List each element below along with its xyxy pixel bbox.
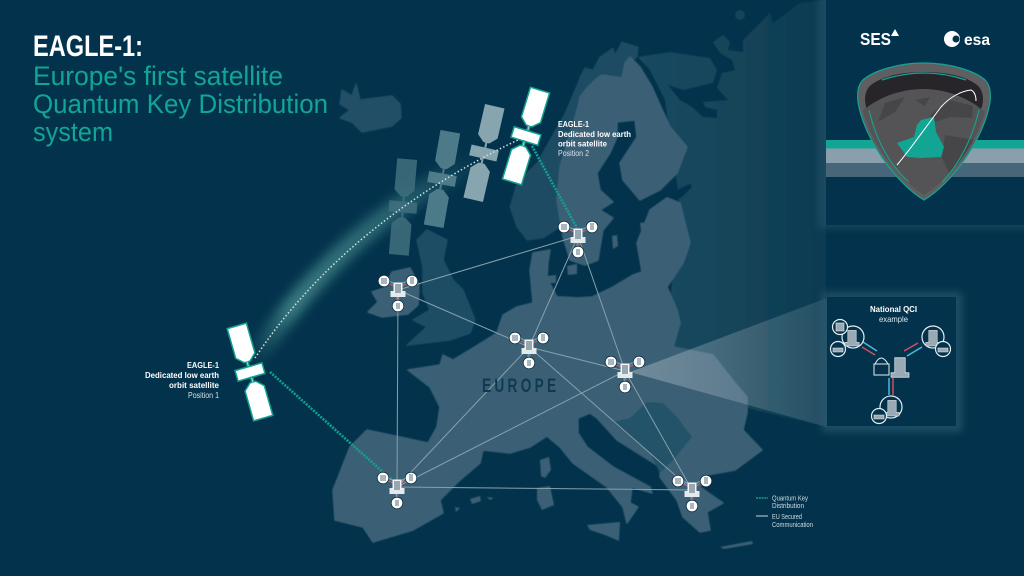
node: central Europe <box>509 332 549 369</box>
panel title: National QCI <box>870 304 917 314</box>
satellite position 1 <box>223 322 277 422</box>
site: bottom <box>872 396 902 424</box>
network links: EU secured communication <box>397 236 692 490</box>
land: Sweden and Finland <box>557 57 687 265</box>
node: eastern Europe <box>605 356 645 393</box>
satellite trail glow <box>255 160 480 358</box>
QKD beam: position 1 <box>270 372 392 480</box>
ghost satellite C <box>385 158 421 256</box>
shield badge <box>857 62 991 201</box>
site: upper left <box>830 320 864 356</box>
legend: Communication <box>772 522 813 529</box>
land: Iceland <box>340 84 401 132</box>
legend <box>756 496 813 529</box>
label: satellite position 2: orbit satellite <box>558 138 607 148</box>
label: satellite position 1: Dedicated low earth <box>145 370 219 380</box>
map label: Europe: EUROPE <box>482 375 556 397</box>
quantum links <box>862 342 922 395</box>
sea: Gulf of Finland <box>650 184 692 213</box>
label: satellite position 2 <box>558 119 631 158</box>
label: satellite position 1: EAGLE-1 <box>187 360 219 370</box>
beam towards National QCI panel <box>630 298 827 427</box>
land: continental Europe <box>333 198 762 542</box>
legend: Quantum Key <box>772 496 808 502</box>
label: satellite position 2: EAGLE-1 <box>558 119 589 129</box>
label: satellite position 1 <box>145 360 219 400</box>
label: satellite position 2: Dedicated low earth <box>558 129 631 139</box>
panel: mission logo <box>817 0 1024 229</box>
QKD beam: position 2 <box>532 146 577 228</box>
node: Ireland <box>378 275 418 312</box>
satellite position 2 <box>499 86 553 186</box>
label: satellite position 1: Position 1 <box>188 390 219 400</box>
site: upper right <box>922 326 950 356</box>
logo: SES: SES <box>860 29 891 49</box>
title: EAGLE-1: <box>33 30 143 63</box>
label: satellite position 2: Position 2 <box>558 148 589 158</box>
map of Europe <box>333 0 826 549</box>
panel subtitle: example <box>879 314 908 324</box>
logo: esa <box>944 31 990 49</box>
land: Ireland <box>368 268 419 317</box>
logo: esa: esa <box>964 32 990 49</box>
panel: National QCI example <box>822 292 962 432</box>
legend: EU Secured <box>772 514 802 521</box>
node: Greece <box>672 475 712 512</box>
central hub <box>874 358 909 377</box>
legend: Distribution <box>772 503 804 510</box>
title: system <box>33 117 113 147</box>
ghost satellite B <box>420 129 464 229</box>
island: Arctic <box>735 10 745 20</box>
land: islands <box>455 222 753 549</box>
node: Sweden <box>558 221 598 258</box>
title: Quantum Key Distribution <box>33 89 328 119</box>
land: Russia and eastern neighbours <box>638 0 826 427</box>
title: Europe's first satellite <box>33 61 283 91</box>
orbit path dotted <box>255 138 522 358</box>
title <box>33 30 328 147</box>
land: United Kingdom <box>407 230 475 345</box>
node: Spain <box>377 472 417 509</box>
land: Balkan states <box>613 402 692 473</box>
label: satellite position 1: orbit satellite <box>169 380 219 390</box>
land: Norway <box>510 42 638 240</box>
ghost satellite A <box>460 103 508 203</box>
stripes <box>826 140 1024 177</box>
